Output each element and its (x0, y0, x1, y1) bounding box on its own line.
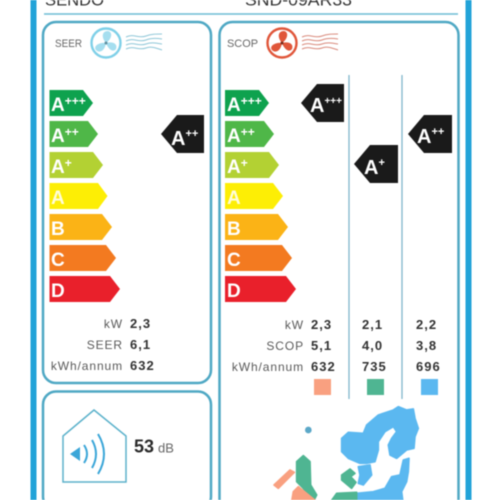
panel: SCOP heating (220, 22, 458, 500)
SCOP values table: 5,1 (311, 338, 332, 353)
energy scale arrows: + (241, 156, 248, 170)
rating tag A+: + (378, 157, 385, 169)
energy scale arrows: C (227, 250, 241, 271)
energy scale arrows: B (227, 219, 241, 240)
SCOP values table: 2,1 (362, 317, 383, 332)
rating tag A++ (408, 115, 452, 153)
SCOP values table: 2,2 (416, 317, 437, 332)
SCOP values table: kW (285, 318, 304, 332)
noise unit: dB (158, 440, 174, 456)
SCOP values table: 696 (416, 359, 441, 374)
energy scale arrows: C (51, 250, 65, 271)
energy scale arrows: A (51, 95, 65, 116)
right frame band (466, 0, 472, 500)
SCOP values table (232, 317, 441, 374)
SCOP values table: 3,8 (416, 338, 437, 353)
rating tag A++ (161, 115, 204, 153)
energy scale arrows: A (227, 95, 241, 116)
energy scale arrows: +++ (241, 94, 262, 108)
climate column dividers (349, 75, 402, 399)
SCOP values table: 735 (362, 359, 387, 374)
energy scale arrows: + (65, 156, 72, 170)
icon: house with speaker (63, 410, 126, 482)
map of European climate zones (274, 407, 418, 500)
icon: heating fan (268, 28, 296, 58)
SCOP label: SCOP (227, 38, 258, 50)
climate legend swatches (314, 379, 438, 395)
energy scale arrows: A (227, 157, 241, 178)
SEER values table: SEER (87, 338, 123, 352)
header rule (44, 13, 458, 15)
rating tag A+++: A (310, 95, 324, 117)
energy scale arrows: ++ (65, 125, 79, 139)
SEER values table (51, 316, 155, 373)
panel: SEER cooling (43, 22, 211, 383)
rating tag A++: ++ (185, 128, 198, 140)
SEER values table: kW (104, 317, 123, 331)
icon: cooling fan (92, 28, 120, 58)
rating tag A+++ (301, 84, 344, 122)
icon: cool air waves (126, 34, 162, 50)
energy scale arrows: D (227, 281, 241, 302)
energy scale arrows: A (51, 188, 65, 209)
SEER values table: 6,1 (130, 337, 151, 352)
energy scale arrows (50, 90, 120, 302)
rating tag A+++: +++ (324, 96, 342, 107)
noise value: 53 (134, 436, 154, 456)
rating tag A++: ++ (431, 126, 444, 138)
energy scale arrows: +++ (65, 94, 86, 108)
energy scale arrows: A (51, 157, 65, 178)
energy scale arrows (225, 90, 296, 302)
SCOP values table: 4,0 (362, 338, 383, 353)
rating tag A++: A (171, 128, 185, 150)
panel: noise level (43, 392, 211, 500)
SEER values table: 632 (130, 358, 155, 373)
energy scale arrows: A (227, 188, 241, 209)
SEER values table: kWh/annum (51, 359, 123, 373)
SCOP values table: SCOP (266, 339, 304, 353)
left frame band (30, 0, 36, 500)
SCOP values table: kWh/annum (232, 360, 304, 374)
energy scale arrows: A (51, 126, 65, 147)
energy scale arrows: B (51, 219, 65, 240)
SCOP values table: 2,3 (311, 317, 332, 332)
energy scale arrows: ++ (241, 125, 255, 139)
energy scale arrows: A (227, 126, 241, 147)
SCOP values table: 632 (311, 359, 336, 374)
rating tag A++: A (417, 126, 431, 148)
SEER label: SEER (55, 38, 82, 50)
energy scale arrows: D (51, 281, 65, 302)
icon: warm air waves (302, 34, 338, 50)
SEER values table: 2,3 (130, 316, 151, 331)
rating tag A+: A (364, 157, 378, 179)
rating tag A+ (354, 145, 398, 183)
